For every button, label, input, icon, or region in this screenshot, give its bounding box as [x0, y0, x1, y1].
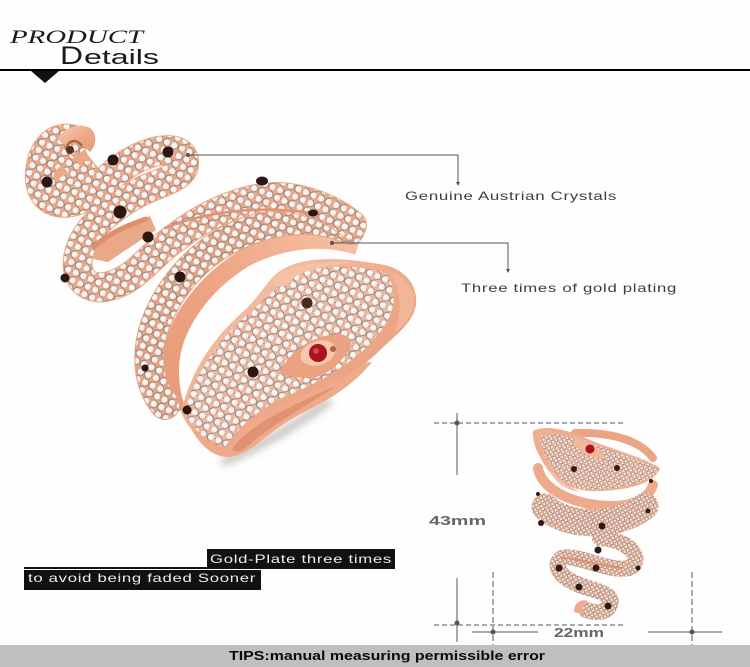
dimension: height 43mm: 43mm — [429, 513, 486, 528]
ring shank — [187, 362, 372, 457]
heading: product details: PRODUCT — [8, 27, 145, 48]
tips bar — [0, 645, 750, 667]
snake eye — [279, 334, 351, 378]
caption: gold-plate three times: Gold-Plate three times — [210, 552, 392, 566]
heading: product details — [8, 27, 159, 70]
plain gold band — [170, 240, 358, 412]
heading: product details: D — [60, 42, 83, 70]
ring shadow — [222, 400, 330, 462]
pave S body — [545, 506, 645, 523]
header rule with pointer — [0, 69, 750, 83]
top gold band — [575, 433, 653, 458]
callout: genuine austrian crystals — [186, 153, 617, 203]
heading: product details: etails — [84, 47, 159, 69]
small eye — [572, 440, 606, 459]
large snake ring photo — [40, 126, 416, 462]
callout: three times of gold plating — [330, 241, 677, 295]
caption: gold-plate three times — [24, 549, 395, 590]
black crystals — [42, 146, 318, 414]
gold fill inside tail loops — [40, 141, 156, 262]
dimension: width 22mm: 22mm — [554, 625, 604, 640]
serpentine tail — [40, 139, 352, 287]
tips bar: TIPS:manual measuring permissible error — [229, 648, 545, 663]
small black crystals — [536, 465, 653, 610]
small ring photo, vertical view — [533, 428, 660, 615]
caption: gold-plate three times: to avoid being faded Sooner — [28, 571, 256, 585]
callout: three times of gold plating: Three times of gold plating — [461, 281, 677, 295]
tail tip — [58, 126, 95, 152]
dimension: height 43mm — [429, 413, 624, 642]
pave band behind — [149, 220, 350, 405]
lower gold band — [538, 468, 653, 506]
callout: genuine austrian crystals: Genuine Austrian Crystals — [405, 189, 617, 203]
small head — [533, 428, 660, 491]
dimension: width 22mm — [472, 572, 722, 645]
snake head — [181, 259, 416, 450]
small tail tip — [574, 600, 588, 615]
